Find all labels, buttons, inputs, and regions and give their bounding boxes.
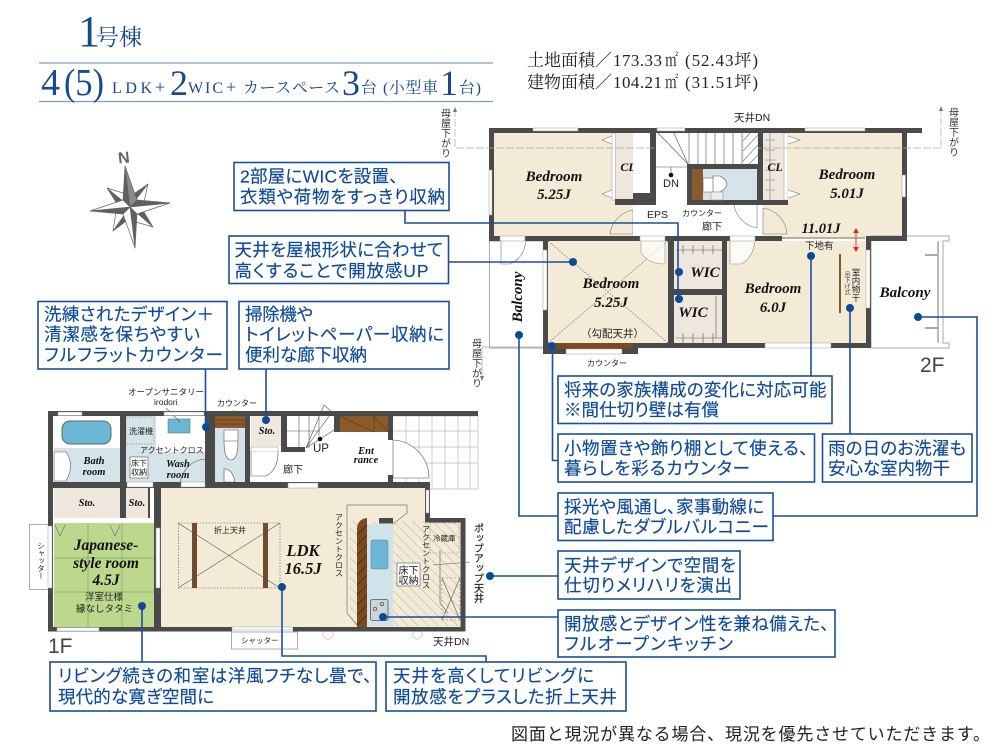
2F slope marker left: 母屋下がり [438, 108, 450, 158]
land and building area: (31.51坪) [685, 73, 758, 92]
stair and corridor 2F: カウンター [682, 209, 722, 218]
heading: building number: 1 [78, 7, 100, 56]
land and building area: 建物面積／ [527, 73, 612, 92]
room: bedroom 5.25J with sloped ceiling: 5.25J [594, 295, 628, 311]
heading: floor plan type: + [226, 77, 236, 97]
callout: double balcony: 配慮したダブルバルコニー [564, 517, 769, 537]
heading: floor plan type: LDK [112, 80, 152, 97]
room: bath [54, 416, 120, 482]
shutter left: シャッター [36, 542, 46, 580]
room: LDK [161, 488, 460, 627]
room: storage [251, 416, 281, 446]
callout: folded ceiling: 天井を高くしてリビングに [393, 666, 594, 686]
room: balcony right [871, 236, 949, 348]
floor plan: 2F [438, 106, 958, 388]
closet left [612, 133, 650, 200]
room: balcony right: Balcony [879, 285, 931, 301]
callout: high ceiling: 高くすることで開放感UP [234, 261, 428, 281]
heading: floor plan type: 台) [459, 79, 481, 97]
shutter bottom: シャッター [241, 636, 278, 645]
room: bedroom 5.25J upper left: 5.25J [537, 187, 571, 203]
room: storages middle [54, 488, 182, 518]
lower slope marker: 母屋下がり [470, 338, 482, 388]
land and building area [527, 51, 758, 92]
callout: Japanese room: リビング続きの和室は洋風フチなし畳で、 [58, 666, 372, 686]
label: counter [217, 399, 257, 422]
room: bath: room [83, 467, 105, 478]
callout: indoor drying [822, 434, 972, 482]
room: bedroom 6.0J: 吊下げ式 [843, 271, 850, 295]
land and building area: 土地面積／ [527, 51, 612, 70]
room: LDK: LDK [286, 541, 320, 560]
callout: WIC storage [234, 162, 449, 210]
room: entrance: Ent [357, 446, 375, 457]
callout: Japanese room [50, 662, 376, 711]
callout: display counter: 暮らしを彩るカウンター [564, 458, 750, 478]
kitchen [357, 518, 470, 627]
heading: floor plan type: カースペース [243, 80, 340, 97]
room: WIC upper [674, 241, 722, 289]
room: Japanese-style room [54, 523, 156, 627]
callout: flat counter: 洗練されたデザイン＋ [44, 304, 214, 324]
heading: floor plan type: 台 [361, 79, 377, 97]
land and building area: 104.21 [613, 73, 662, 92]
label: 2F: 2F [920, 354, 945, 377]
heading: floor plan type: 4 [41, 62, 60, 104]
room: entrance: rance [354, 455, 379, 466]
callout: indoor drying: 安心な室内物干 [828, 458, 950, 478]
room: bedroom 6.0J: 6.0J [760, 300, 787, 316]
stair and corridor 2F: DN [663, 178, 679, 190]
stair and corridor 2F [633, 129, 763, 236]
room: bedroom 5.01J: 5.01J [830, 186, 864, 202]
heading: floor plan type [39, 62, 493, 104]
room: wash: Wash [166, 459, 190, 470]
callout: corridor storage [239, 302, 449, 369]
corridor and stair 1F [250, 405, 335, 482]
room: wash: アクセントクロス [140, 446, 204, 455]
callout: ceiling design: 天井デザインで空間を [564, 556, 736, 576]
floor plan: 1F [30, 387, 484, 658]
label: open sanitary: irodori [154, 397, 178, 407]
connector dots [138, 252, 922, 621]
ceiling DN label 2F: 天井DN [734, 111, 770, 124]
kitchen: アクセントクロス [422, 525, 430, 589]
heading: floor plan type: WIC [188, 80, 223, 97]
heading: floor plan type: (小型車 [383, 79, 438, 97]
callout: open kitchen: フルオープンキッチン [564, 634, 733, 654]
room: WIC lower: WIC [678, 305, 709, 321]
room: wash [126, 416, 206, 482]
room: bedroom 5.01J: Bedroom [818, 167, 875, 183]
heading: building number [78, 7, 142, 56]
heading: floor plan type: 3 [342, 63, 360, 103]
vertical label: pop up ceiling: ポップアップ天井 [472, 523, 484, 604]
callout: folded ceiling [386, 662, 626, 711]
callout: flat counter [38, 302, 227, 369]
footnote: 図面と現況が異なる場合、現況を優先させていただきます。 [511, 725, 990, 744]
room: bedroom 5.25J with sloped ceiling: （勾配天井） [581, 327, 644, 340]
room: storages middle: Sto. [79, 498, 95, 509]
callout: flat counter: 清潔感を保ちやすい [44, 324, 200, 344]
label: open sanitary [128, 387, 204, 422]
1F walls [48, 411, 478, 640]
heading: building number: 号棟 [96, 25, 142, 50]
room: bath: Bath [82, 456, 105, 467]
kitchen: 収納 [398, 574, 418, 587]
closet right: CL [767, 160, 783, 174]
2F slope marker right [758, 106, 958, 157]
room: Japanese-style room: 洋室仕様 [85, 591, 124, 603]
heading: floor plan type: (5) [64, 62, 104, 104]
room: WIC upper: WIC [690, 265, 721, 281]
counter 2F [543, 343, 638, 368]
land and building area: (52.43坪) [685, 51, 758, 70]
callout: open kitchen [558, 610, 835, 657]
kitchen: 冷蔵庫 [433, 533, 456, 543]
closet left: CL [620, 160, 636, 174]
2F slope marker left [438, 107, 656, 158]
room: bedroom 6.0J: Bedroom [744, 281, 801, 297]
callout: indoor drying: 雨の日のお洗濯も [828, 438, 966, 458]
room: bedroom 5.01J: 11.01J [801, 221, 841, 237]
2F walls [489, 128, 922, 353]
land and building area: ㎡ [665, 73, 678, 92]
room: bedroom 5.25J with sloped ceiling: Bedroom [582, 276, 639, 292]
land and building area: 173.33 [613, 51, 662, 70]
room: Japanese-style room: style room [72, 555, 139, 572]
callout: flexible walls [558, 376, 832, 424]
callout: corridor storage: 便利な廊下収納 [245, 345, 367, 365]
callout: high ceiling [229, 236, 448, 284]
heading: floor plan type: 1 [440, 63, 458, 103]
room: wash: 収納 [131, 467, 147, 477]
room: balcony left [490, 241, 544, 348]
closet right [763, 133, 788, 200]
toilet 2F [687, 164, 763, 205]
counter 2F: カウンター [587, 359, 627, 368]
callout: Japanese room: 現代的な寛ぎ空間に [58, 687, 214, 707]
shutter bottom [232, 632, 298, 649]
label: open sanitary: オープンサニタリー [128, 387, 204, 397]
outdoor steps [393, 416, 478, 489]
room: wash: room [167, 470, 189, 481]
callout: folded ceiling: 開放感をプラスした折上天井 [393, 687, 617, 707]
label: ceiling DN: 天井DN [433, 635, 469, 648]
callout: ceiling design: 仕切りメリハリを演出 [564, 576, 732, 596]
room: wash: 洗濯機 [129, 426, 153, 436]
room: bedroom 5.25J upper left: Bedroom [525, 169, 582, 185]
heading: floor plan type: + [155, 77, 165, 97]
callout: WIC storage: 2部屋にWICを設置、 [240, 166, 398, 186]
land and building area: ㎡ [665, 51, 678, 70]
room: wash: 床下 [131, 459, 147, 468]
toilet 1F [215, 416, 245, 482]
heading: floor plan type: 2 [170, 63, 188, 103]
callout: WIC storage: 衣類や荷物をすっきり収納 [240, 187, 445, 207]
callout: high ceiling: 天井を屋根形状に合わせて [234, 240, 443, 260]
lower slope marker [470, 338, 543, 388]
room: Japanese-style room: 4.5J [91, 572, 121, 589]
icon: compass [90, 149, 170, 248]
callout: corridor storage: 掃除機や [245, 304, 313, 324]
callout: ceiling design [558, 551, 740, 599]
label: 1F: 1F [48, 635, 73, 658]
room: bedroom 5.25J with sloped ceiling [548, 241, 668, 343]
callout: flat counter: フルフラットカウンター [44, 345, 223, 365]
room: bedroom 6.0J: 室内物干 [851, 267, 861, 303]
icon: compass: N [117, 149, 131, 168]
callout: flexible walls: ※間仕切り壁は有償 [564, 400, 719, 420]
callout: open kitchen: 開放感とデザイン性を兼ね備えた、 [564, 614, 829, 634]
2F slope marker right: 母屋下がり [946, 107, 958, 157]
corridor and stair 1F: 廊下 [283, 463, 303, 476]
label: counter: カウンター [217, 399, 257, 408]
callout: double balcony [558, 493, 773, 540]
connector lines [142, 211, 977, 662]
room: storages middle: Sto. [129, 498, 145, 509]
room: Japanese-style room: 縁なしタタミ [76, 603, 133, 615]
folded ceiling [178, 523, 280, 588]
room: bedroom 6.0J: 下地有 [805, 240, 834, 252]
room: WIC lower [674, 295, 722, 343]
room: LDK: 16.5J [284, 559, 322, 578]
stair and corridor 2F: EPS [647, 209, 668, 221]
callout: flexible walls: 将来の家族構成の変化に対応可能 [564, 380, 826, 400]
room: LDK: アクセントクロス [334, 513, 344, 577]
room: bedroom 5.01J [763, 133, 902, 238]
room: storages middle: PS [168, 498, 182, 510]
folded ceiling: 折上天井 [214, 525, 246, 535]
room: Japanese-style room: Japanese- [73, 537, 138, 554]
callout: double balcony: 採光や風通し、家事動線に [564, 497, 764, 517]
room: bedroom 6.0J [727, 228, 866, 343]
room: bedroom 5.25J upper left [494, 133, 633, 236]
room: balcony left: Balcony [510, 271, 526, 323]
stair and corridor 2F: 廊下 [702, 220, 722, 233]
callout: display counter [558, 434, 814, 482]
room: entrance [340, 416, 388, 482]
callout: display counter: 小物置きや飾り棚として使える、 [564, 438, 808, 458]
kitchen: 床下 [398, 565, 418, 577]
callout: corridor storage: トイレットペーパー収納に [245, 324, 444, 344]
shutter left [30, 524, 48, 590]
room: storage: Sto. [259, 426, 275, 437]
corridor and stair 1F: UP [313, 443, 329, 455]
